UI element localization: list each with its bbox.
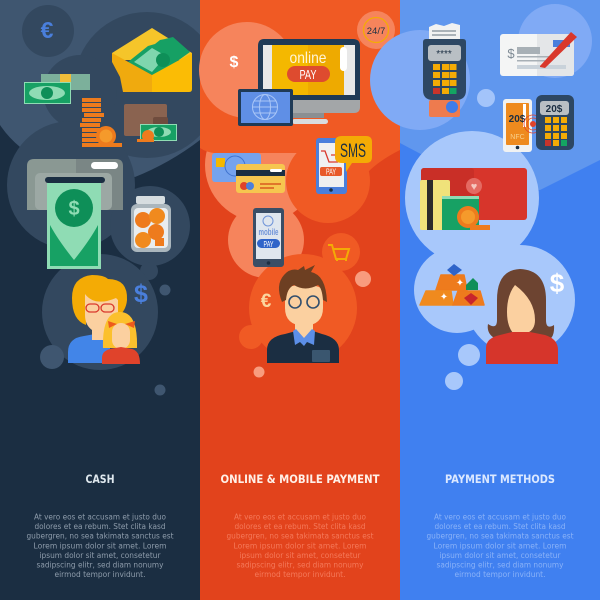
text block: cash description: At vero eos et accusam et justo duo	[34, 512, 166, 522]
icon: mobile pay phone: mobile	[258, 227, 278, 237]
text block: cash description: Lorem ipsum dolor sit amet. Lorem	[34, 540, 166, 550]
icon: card terminal: ****	[436, 49, 452, 60]
heading: payment methods: PAYMENT METHODS	[445, 472, 555, 486]
icon: dollar: $	[230, 54, 239, 71]
icon: gold and gems	[420, 264, 484, 305]
icon: ATM with bill: $	[68, 198, 80, 220]
text block: payment methods description: sadipscing elitr, sed diam nonumy	[436, 560, 564, 570]
text block: cash description: gubergren, no sea takimata sanctus est	[26, 531, 174, 541]
text block: online payment description: gubergren, no sea takimata sanctus est	[226, 531, 374, 541]
text block: online payment description: ipsum dolor sit amet, consetetur	[240, 550, 361, 560]
icon: gold and gems: ✦	[456, 278, 464, 289]
icon: dollar: $	[550, 268, 565, 298]
icon: phone with SMS	[316, 136, 372, 194]
icon: NFC phone and reader	[503, 95, 574, 152]
icon: 24/7	[364, 18, 388, 42]
text block: payment methods description: ipsum dolor sit amet, consetetur	[440, 550, 561, 560]
text block: payment methods description: gubergren, no sea takimata sanctus est	[426, 531, 574, 541]
text block: cash description	[26, 512, 174, 579]
text block: online payment description: At vero eos et accusam et justo duo	[234, 512, 366, 522]
icon: euro: €	[41, 17, 54, 43]
panel: online and mobile payment	[199, 0, 400, 600]
icon: mobile pay phone: PAY	[264, 240, 274, 249]
icon: red wallet with card and cash: ♥	[471, 181, 477, 193]
icon: euro: €	[261, 291, 272, 312]
icon: wallet with money	[124, 104, 177, 142]
icon: monitor online pay: PAY	[300, 67, 317, 82]
text block: online payment description: eirmod tempor invidunt.	[254, 569, 346, 579]
heading: online and mobile payment: ONLINE & MOBILE PAYMENT	[220, 472, 380, 486]
icon: card terminal	[423, 23, 466, 117]
figure: mother and child	[68, 275, 140, 364]
panel: cash	[0, 0, 220, 600]
text block: payment methods description: dolores et ea rebum. Stet clita kasd	[434, 521, 566, 531]
text block: cash description: sadipscing elitr, sed diam nonumy	[36, 560, 164, 570]
icon: NFC phone and reader: 20$	[509, 114, 526, 125]
heading: cash: CASH	[86, 472, 114, 486]
icon: gold and gems: ✦	[440, 292, 448, 303]
icon: tablet globe	[238, 89, 293, 126]
icon: dollar: $	[134, 280, 148, 308]
text block: payment methods description: Lorem ipsum dolor sit amet. Lorem	[434, 540, 566, 550]
text block: online payment description: sadipscing elitr, sed diam nonumy	[236, 560, 364, 570]
text block: payment methods description: At vero eos et accusam et justo duo	[434, 512, 566, 522]
icon: NFC phone and reader: 20$	[546, 104, 563, 115]
icon: coin jar	[131, 196, 171, 252]
icon: shopping cart	[328, 245, 349, 261]
icon: phone with SMS: PAY	[326, 168, 336, 176]
panel: payment methods	[370, 0, 600, 600]
icon: red wallet with card and cash	[420, 168, 527, 230]
icon: NFC phone and reader: NFC	[510, 134, 525, 141]
text block: cash description: dolores et ea rebum. Stet clita kasd	[34, 521, 166, 531]
figure: woman	[486, 269, 558, 364]
text block: payment methods description	[426, 512, 574, 579]
icon: monitor online pay	[258, 39, 360, 124]
text block: online payment description: Lorem ipsum dolor sit amet. Lorem	[234, 540, 366, 550]
icon: 24/7: 24/7	[367, 26, 385, 37]
text block: payment methods description: eirmod tempor invidunt.	[454, 569, 546, 579]
figure: man with glasses	[267, 265, 339, 363]
icon: ATM with bill	[27, 159, 123, 269]
icon: coin stack	[80, 98, 122, 147]
text block: cash description: ipsum dolor sit amet, consetetur	[40, 550, 161, 560]
icon: phone with SMS: SMS	[340, 141, 366, 162]
text block: online payment description: dolores et ea rebum. Stet clita kasd	[234, 521, 366, 531]
text block: cash description: eirmod tempor invidunt.	[54, 569, 146, 579]
icon: cheque and pen	[500, 32, 577, 76]
icon: mobile pay phone	[253, 208, 284, 267]
icon: cheque and pen: $	[507, 46, 515, 61]
icon: envelope with cash	[112, 28, 192, 92]
text block: online payment description	[226, 512, 374, 579]
icon: credit cards	[212, 153, 285, 193]
icon: banknotes	[24, 74, 90, 104]
icon: monitor online pay: online	[290, 50, 327, 67]
